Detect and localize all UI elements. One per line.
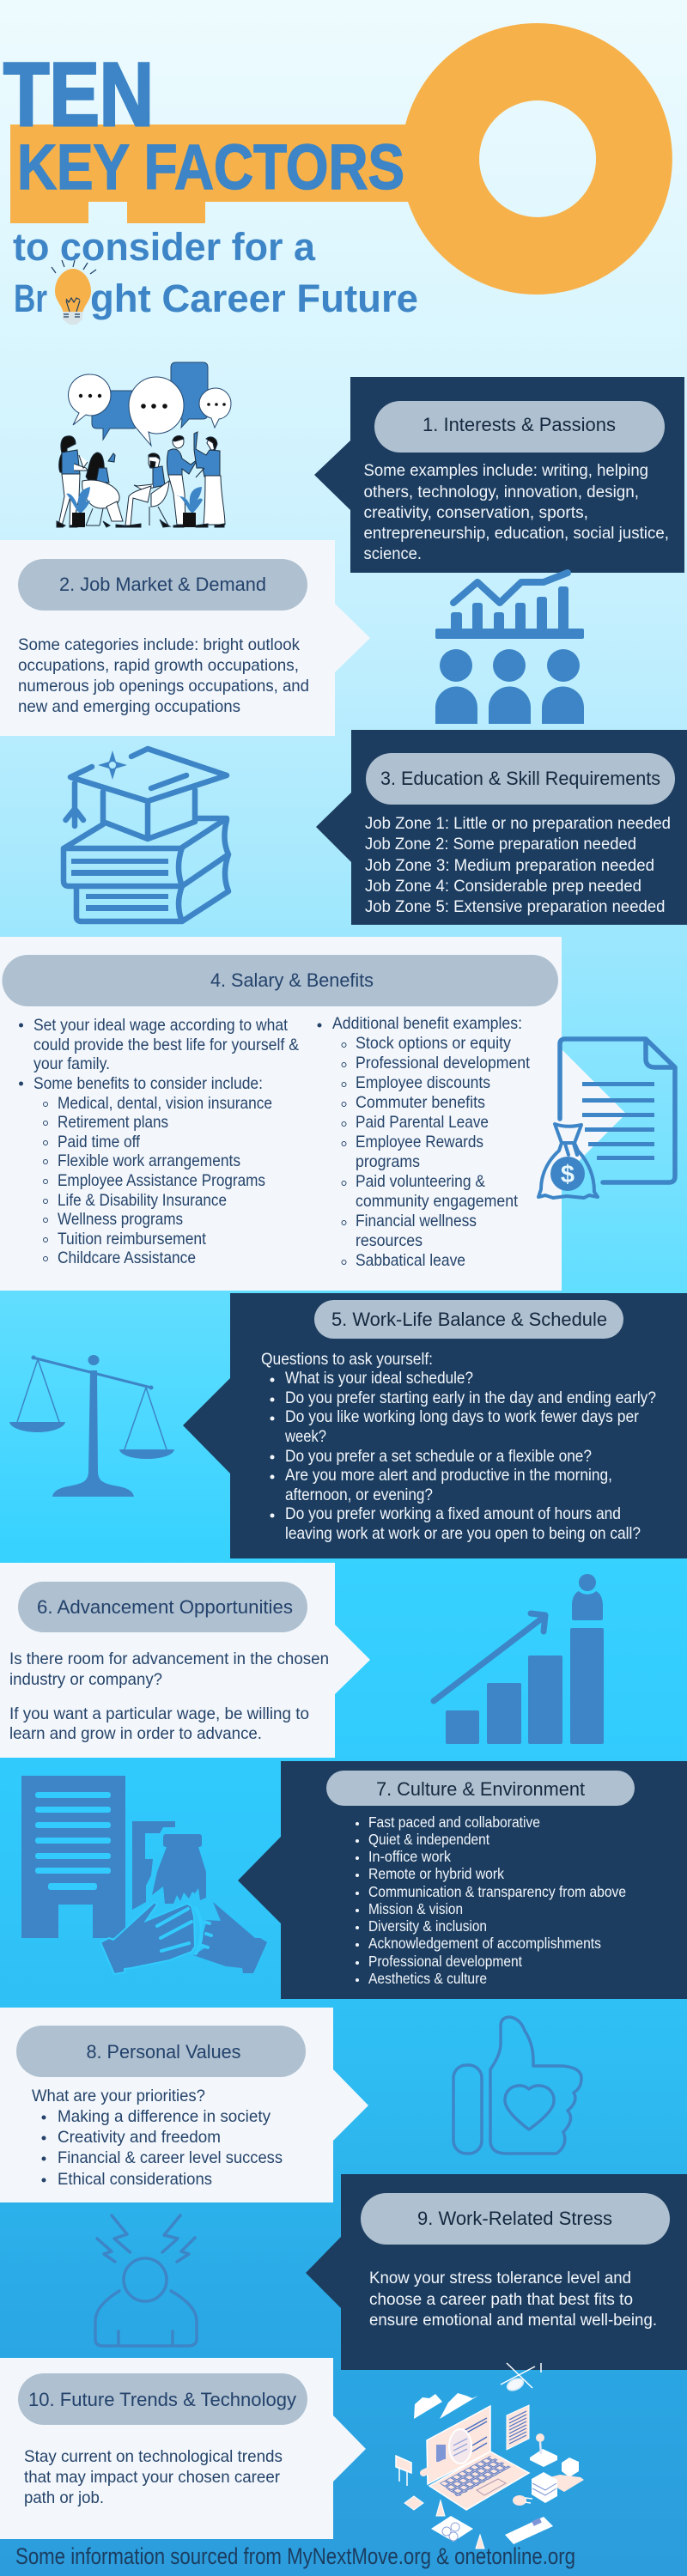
culture list: Aesthetics & culture [368, 1970, 487, 1987]
panel 9: Work-Related Stress [306, 2174, 687, 2370]
right column list: Commuter benefits [356, 1093, 485, 1112]
panel background with pointer [314, 377, 684, 573]
pill heading: 10. Future Trends & Technology [28, 2389, 297, 2410]
body text: Know your stress tolerance level and [369, 2269, 631, 2287]
dots in bubbles [79, 394, 226, 409]
panel 4: Salary & Benefits [0, 937, 626, 1291]
culture list: Diversity & inclusion [368, 1917, 487, 1935]
right column list: Employee Rewards [356, 1133, 483, 1151]
laptop base [429, 2451, 529, 2510]
right column list: programs [356, 1152, 420, 1171]
panel 3: Education & Skill Requirements [316, 730, 687, 925]
pill heading: 9. Work-Related Stress [417, 2208, 612, 2229]
icon: document with money bag [538, 1039, 675, 1198]
joystick [530, 2449, 557, 2467]
right column list: Employee discounts [356, 1073, 490, 1092]
job zones list: Job Zone 1: Little or no preparation needed [365, 814, 671, 833]
questions list: Are you more alert and productive in the morning, [285, 1466, 612, 1485]
road sign [396, 2456, 411, 2486]
body text: industry or company? [9, 1670, 162, 1689]
right column list: Paid Parental Leave [356, 1113, 489, 1132]
body text [364, 461, 669, 563]
body text: Is there room for advancement in the chosen [9, 1649, 329, 1668]
pill heading: 6. Advancement Opportunities [37, 1596, 293, 1618]
icon: thumbs up with heart [453, 2017, 581, 2154]
pill heading: 3. Education & Skill Requirements [380, 768, 660, 789]
panel background with pointer [0, 1563, 370, 1758]
right column list: Financial wellness [356, 1212, 477, 1230]
pill heading [326, 1771, 635, 1806]
pill heading: 4. Salary & Benefits [210, 969, 374, 991]
left column list: Set your ideal wage according to what [33, 1016, 289, 1035]
subtitle line 1: to consider for a [13, 225, 316, 269]
machine [562, 2458, 579, 2477]
clouds [414, 2394, 442, 2419]
right column list: resources [356, 1231, 423, 1250]
body text: Some examples include: writing, helping [364, 461, 648, 480]
person: standing in long skirt [194, 432, 225, 527]
body text [24, 2447, 283, 2507]
priorities list: Creativity and freedom [58, 2128, 221, 2147]
pill heading [361, 2193, 670, 2245]
panel background with pointer [238, 1761, 687, 1999]
magnifier [423, 2463, 445, 2473]
job zones list: Job Zone 4: Considerable prep needed [365, 877, 641, 896]
person: standing with glasses [161, 435, 198, 527]
priorities list: Ethical considerations [58, 2170, 212, 2189]
left column list: your family. [33, 1054, 110, 1073]
top hand [152, 1834, 206, 1904]
pill heading: 7. Culture & Environment [376, 1778, 586, 1800]
left column list: Paid time off [58, 1133, 141, 1151]
pill heading: 2. Job Market & Demand [59, 574, 266, 595]
person: standing left [57, 436, 88, 527]
pill heading [18, 1582, 307, 1632]
panel 5: Work-Life Balance & Schedule [183, 1293, 687, 1558]
panel 8: Personal Values [0, 2008, 368, 2202]
right column list: Paid volunteering & [356, 1172, 485, 1191]
subtitle line 2: ght Career Future [90, 276, 418, 320]
document [507, 2405, 529, 2450]
building [21, 1776, 125, 1938]
subtitle line 2: Br [14, 276, 47, 320]
job zones list: Job Zone 5: Extensive preparation needed [365, 897, 665, 916]
speech bubbles [69, 362, 231, 446]
culture list: Professional development [368, 1953, 522, 1970]
culture list: Communication & transparency from above [368, 1883, 626, 1900]
icon: isometric laptop and technology [396, 2363, 584, 2549]
body text [369, 2269, 657, 2330]
body text: ensure emotional and mental well-being. [369, 2311, 657, 2330]
title: TEN: TEN [3, 45, 154, 145]
left column list: Medical, dental, vision insurance [58, 1094, 272, 1113]
panel background with pointer [183, 1293, 687, 1558]
header: key graphic and title [3, 23, 672, 325]
culture list: Fast paced and collaborative [368, 1814, 540, 1831]
left column list: Tuition reimbursement [58, 1230, 207, 1249]
panel 7: Culture & Environment [238, 1761, 687, 1999]
left column list: Retirement plans [58, 1113, 168, 1132]
body text: science. [364, 544, 422, 563]
body text: choose a career path that best fits to [369, 2290, 633, 2309]
server [532, 2472, 557, 2503]
culture list: Acknowledgement of accomplishments [368, 1935, 601, 1952]
finger gaps [157, 1908, 211, 1953]
pill heading [16, 2026, 306, 2077]
body text [18, 635, 309, 716]
icon: light bulb [52, 260, 96, 325]
body text: entrepreneurship, education, social justice, [364, 524, 669, 543]
job zones list: Job Zone 3: Medium preparation needed [365, 856, 654, 875]
left column list: Flexible work arrangements [58, 1151, 240, 1170]
right hand [193, 1902, 267, 1973]
icon: document with money bag: $ [561, 1161, 575, 1188]
priorities list [32, 2087, 283, 2189]
body text: that may impact your chosen career [24, 2468, 280, 2487]
second building [132, 1821, 175, 1910]
icon: office building with stacked hands [21, 1776, 267, 1974]
body text: numerous job openings occupations, and [18, 677, 309, 696]
body text: Stay current on technological trends [24, 2447, 283, 2466]
pill heading: 5. Work-Life Balance & Schedule [331, 1309, 607, 1330]
body text: path or job. [24, 2488, 104, 2507]
body text: occupations, rapid growth occupations, [18, 656, 299, 675]
pill heading [2, 955, 558, 1006]
panel background with pointer [0, 2008, 368, 2202]
culture list [356, 1814, 626, 1987]
icon: orange key [10, 23, 672, 295]
body text: creativity, conservation, sports, [364, 503, 588, 522]
right column list [318, 1014, 531, 1270]
panel 6: Advancement Opportunities [0, 1563, 370, 1758]
body text: If you want a particular wage, be willing to [9, 1704, 309, 1723]
panel 1: Interests & Passions [314, 377, 684, 573]
plant left [66, 487, 90, 527]
left column list: Wellness programs [58, 1210, 183, 1229]
left column list: Some benefits to consider include: [33, 1074, 263, 1093]
left column list [19, 1016, 299, 1267]
job zones list [365, 814, 671, 916]
helicopter [501, 2363, 541, 2393]
questions list: Do you like working long days to work fewer days per [285, 1407, 639, 1426]
pill heading [374, 401, 665, 453]
culture list: Mission & vision [368, 1900, 463, 1917]
body text: Some categories include: bright outlook [18, 635, 300, 654]
icon: people talking with speech bubbles [57, 362, 231, 527]
priorities list: Financial & career level success [58, 2148, 283, 2167]
questions list: week? [284, 1427, 326, 1446]
pill heading [314, 1300, 623, 1339]
panel 2: Job Market & Demand [0, 540, 370, 736]
pill heading: 8. Personal Values [86, 2041, 240, 2063]
plant right [177, 487, 203, 527]
priorities list: What are your priorities? [32, 2087, 205, 2105]
right column list: Additional benefit examples: [332, 1014, 522, 1033]
left hand [100, 1902, 195, 1974]
panel background with pointer [0, 937, 626, 1291]
questions list: What is your ideal schedule? [285, 1369, 473, 1388]
pill heading: 1. Interests & Passions [423, 414, 616, 435]
questions list: afternoon, or evening? [285, 1485, 433, 1504]
panel background with pointer [316, 730, 687, 925]
pill heading [18, 559, 307, 611]
job zones list: Job Zone 2: Some preparation needed [365, 835, 636, 854]
left column list: Employee Assistance Programs [58, 1171, 265, 1190]
culture list: In-office work [368, 1848, 451, 1865]
right column list: Professional development [356, 1054, 531, 1072]
body text [9, 1649, 329, 1743]
panel background with pointer [0, 540, 370, 736]
questions list: Do you prefer working a fixed amount of hours and [285, 1504, 621, 1523]
title: KEY FACTORS: KEY FACTORS [17, 131, 404, 203]
chips and plug [404, 2496, 423, 2510]
person: seated with beard [123, 453, 169, 527]
panel background with pointer [306, 2174, 687, 2370]
body text: learn and grow in order to advance. [9, 1724, 262, 1743]
left column list: could provide the best life for yourself & [33, 1036, 299, 1054]
questions list [261, 1350, 656, 1543]
body text: others, technology, innovation, design, [364, 483, 639, 501]
panel background with pointer [0, 2358, 366, 2539]
right column list: Stock options or equity [356, 1034, 511, 1053]
right column list: Sabbatical leave [356, 1251, 465, 1270]
body text: new and emerging occupations [18, 697, 240, 716]
subtitle line 2: i [67, 276, 78, 320]
icon: graduation cap on books [64, 749, 228, 921]
questions list: Do you prefer a set schedule or a flexible one? [285, 1447, 592, 1466]
person: seated with dark hair [82, 453, 125, 527]
culture list: Remote or hybrid work [368, 1865, 504, 1882]
panel 10: Future Trends & Technology [0, 2358, 366, 2539]
pill heading [18, 2373, 307, 2425]
icon: market chart above three people [435, 573, 584, 724]
icon: rising bars with arrow and person [434, 1574, 604, 1744]
pill heading [366, 753, 675, 805]
questions list: leaving work at work or are you open to being on call? [285, 1524, 641, 1543]
left column list: Life & Disability Insurance [58, 1191, 227, 1210]
questions list: Questions to ask yourself: [261, 1350, 433, 1369]
icon: balance scale [9, 1355, 174, 1497]
priorities list: Making a difference in society [58, 2107, 271, 2126]
culture list: Quiet & independent [368, 1831, 489, 1848]
laptop screen [427, 2406, 490, 2484]
left column list: Childcare Assistance [58, 1249, 196, 1267]
right column list: community engagement [356, 1192, 519, 1211]
icon: stressed person with lightning [95, 2215, 197, 2346]
footer source note: Some information sourced from MyNextMove.org & onetonline.org [15, 2543, 575, 2569]
